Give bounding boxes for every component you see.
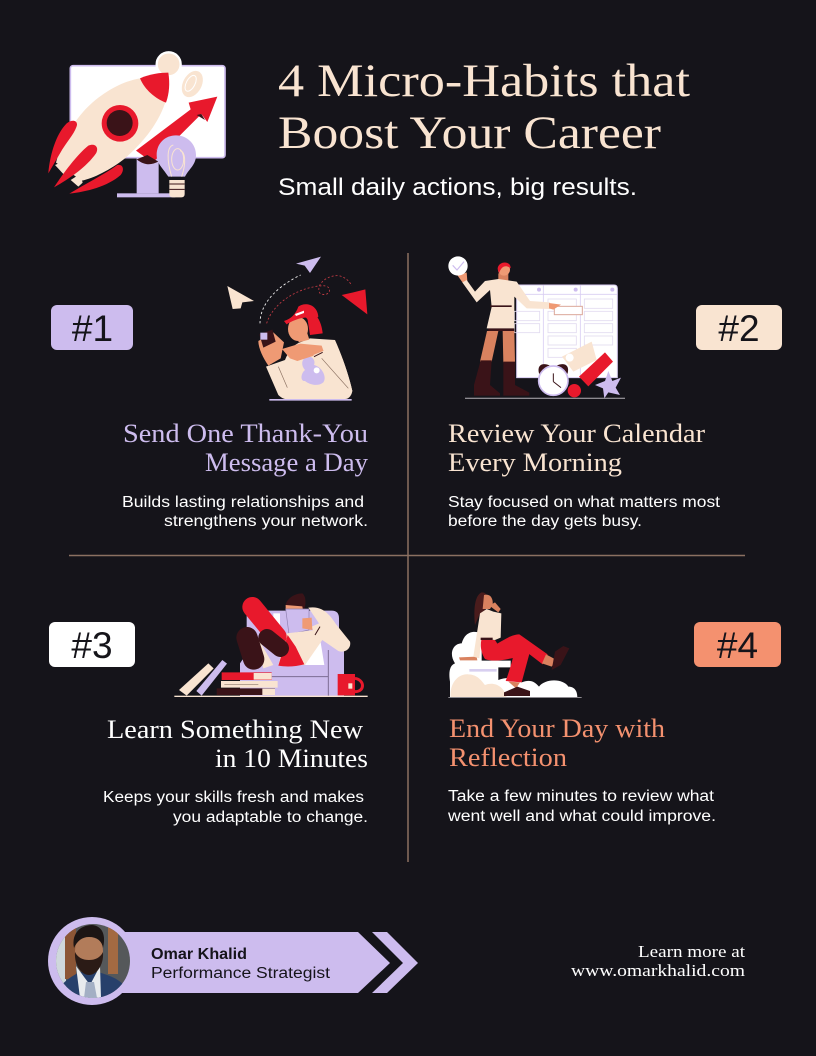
heading: review calendar: Every Morning bbox=[448, 448, 622, 477]
heading: review calendar bbox=[448, 419, 705, 477]
text: builds relationships: Builds lasting relationships and bbox=[122, 494, 364, 511]
footer banner: author name arrow bbox=[120, 932, 418, 993]
heading: review calendar: Review Your Calendar bbox=[448, 419, 705, 448]
badge: #1 bbox=[51, 305, 133, 350]
heading: send thank-you: Send One Thank-You bbox=[123, 419, 368, 448]
title: 4 Micro-Habits that bbox=[278, 55, 690, 107]
text: keeps skills fresh: you adaptable to change. bbox=[173, 809, 368, 826]
text: keeps skills fresh bbox=[103, 789, 368, 826]
heading: learn something new: Learn Something New bbox=[107, 715, 363, 744]
subtitle: Small daily actions, big results. bbox=[278, 174, 637, 201]
illustration: person presenting a calendar bbox=[448, 256, 625, 399]
badge: #3 bbox=[49, 622, 135, 667]
text: stay focused: before the day gets busy. bbox=[448, 513, 642, 530]
badge: #3: #3 bbox=[71, 625, 113, 666]
illustration: woman sitting on clouds reflecting bbox=[448, 592, 582, 698]
text: stay focused bbox=[448, 494, 721, 530]
heading: send thank-you: Message a Day bbox=[205, 448, 368, 477]
text: builds relationships bbox=[122, 494, 368, 530]
text: take a few minutes: went well and what could improve. bbox=[447, 808, 716, 825]
text: keeps skills fresh: Keeps your skills fresh and makes bbox=[103, 789, 364, 806]
portrait: author photo bbox=[48, 917, 136, 1005]
heading: end your day: End Your Day with bbox=[449, 714, 665, 743]
title bbox=[278, 55, 690, 159]
heading: learn something new: in 10 Minutes bbox=[215, 744, 368, 773]
text: take a few minutes bbox=[447, 788, 716, 825]
badge: #1: #1 bbox=[72, 308, 113, 349]
heading: send thank-you bbox=[123, 419, 368, 477]
heading: end your day bbox=[449, 714, 665, 772]
text: author name and role: Performance Strategist bbox=[151, 965, 331, 982]
title: Boost Your Career bbox=[278, 107, 661, 159]
text: author name and role: Omar Khalid bbox=[151, 946, 247, 963]
illustration: woman texting with paper planes bbox=[227, 257, 367, 401]
icon: rocket launching from monitor with growth arrow and light bulb bbox=[48, 52, 225, 197]
illustration: person reading on an armchair bbox=[174, 593, 368, 697]
text: author name and role bbox=[151, 946, 331, 982]
heading: end your day: Reflection bbox=[449, 743, 567, 772]
badge: #2: #2 bbox=[718, 308, 760, 349]
text: learn more link: www.omarkhalid.com bbox=[571, 961, 745, 980]
text: learn more link bbox=[571, 942, 745, 980]
badge: #2 bbox=[696, 305, 782, 350]
text: learn more link: Learn more at bbox=[638, 942, 745, 961]
text: stay focused: Stay focused on what matters most bbox=[448, 494, 721, 511]
heading: learn something new bbox=[107, 715, 368, 773]
badge: #4: #4 bbox=[717, 625, 758, 666]
badge: #4 bbox=[694, 622, 781, 667]
text: builds relationships: strengthens your network. bbox=[164, 513, 368, 530]
text: take a few minutes: Take a few minutes to review what bbox=[448, 788, 715, 805]
